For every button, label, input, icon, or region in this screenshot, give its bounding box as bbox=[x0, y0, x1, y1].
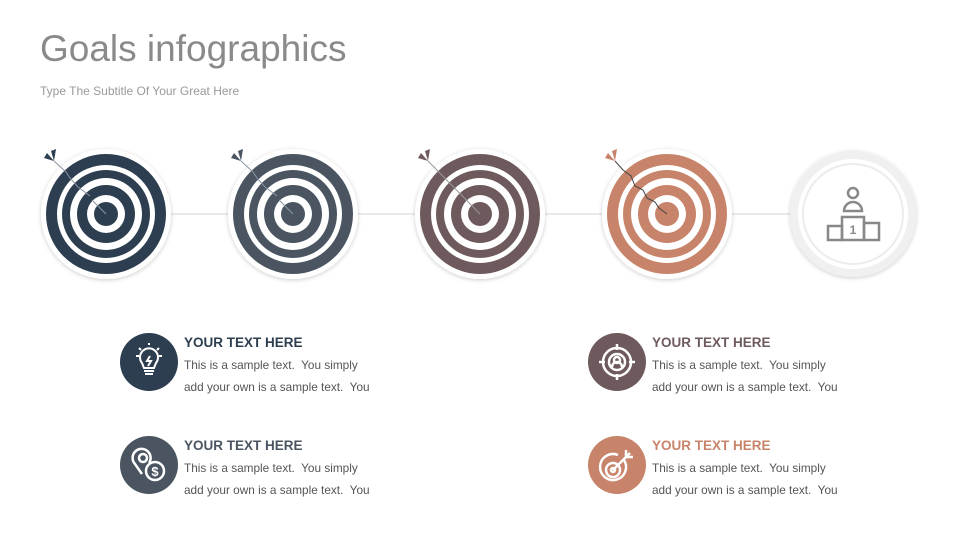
item 1: YOUR TEXT HERE bbox=[184, 335, 303, 350]
target 2 bbox=[228, 149, 358, 279]
item 3: This is a sample text. You simply bbox=[652, 358, 826, 372]
target 3 bbox=[415, 149, 545, 279]
icon: crosshair person bbox=[588, 333, 646, 391]
icon: bulb bbox=[120, 333, 178, 391]
item 2 bbox=[120, 436, 370, 497]
item 2: YOUR TEXT HERE bbox=[184, 438, 303, 453]
target 5: podium bbox=[790, 151, 916, 277]
item 1: add your own is a sample text. You bbox=[184, 380, 370, 394]
item 3 bbox=[588, 333, 838, 394]
icon: location money: $ bbox=[151, 464, 159, 479]
subtitle: Type The Subtitle Of Your Great Here bbox=[40, 84, 239, 98]
icon: location money bbox=[120, 436, 178, 494]
item 1: This is a sample text. You simply bbox=[184, 358, 358, 372]
item 4 bbox=[588, 436, 838, 497]
title: Goals infographics bbox=[40, 28, 346, 69]
item 2: This is a sample text. You simply bbox=[184, 461, 358, 475]
item 3: YOUR TEXT HERE bbox=[652, 335, 771, 350]
item 4: add your own is a sample text. You bbox=[652, 483, 838, 497]
item 4: This is a sample text. You simply bbox=[652, 461, 826, 475]
targets row bbox=[39, 148, 918, 282]
target 1 bbox=[41, 149, 171, 279]
item 4: YOUR TEXT HERE bbox=[652, 438, 771, 453]
connector line bbox=[106, 213, 854, 215]
item 3: add your own is a sample text. You bbox=[652, 380, 838, 394]
target 5: podium: 1 bbox=[850, 223, 857, 237]
item 1 bbox=[120, 333, 370, 394]
icon: target arrow bbox=[588, 436, 646, 494]
target 4 bbox=[602, 149, 732, 279]
item 2: add your own is a sample text. You bbox=[184, 483, 370, 497]
